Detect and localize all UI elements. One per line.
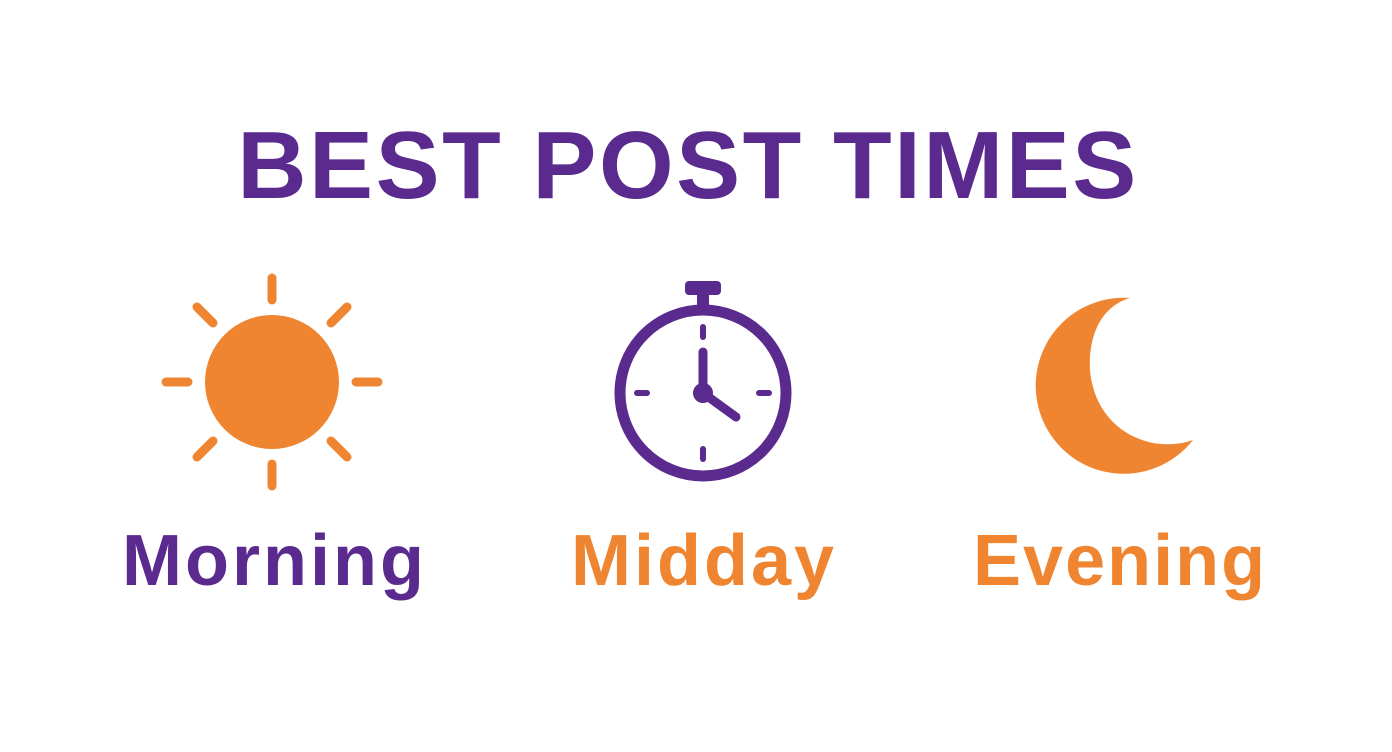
icon: moon <box>1036 298 1193 474</box>
title: BEST POST TIMES <box>237 112 1139 219</box>
label: Morning: Morning <box>122 521 427 601</box>
label: Midday: Midday <box>571 521 837 601</box>
icon: stopwatch <box>614 281 792 482</box>
icon: sun <box>162 274 382 490</box>
label: Evening: Evening <box>973 521 1267 601</box>
